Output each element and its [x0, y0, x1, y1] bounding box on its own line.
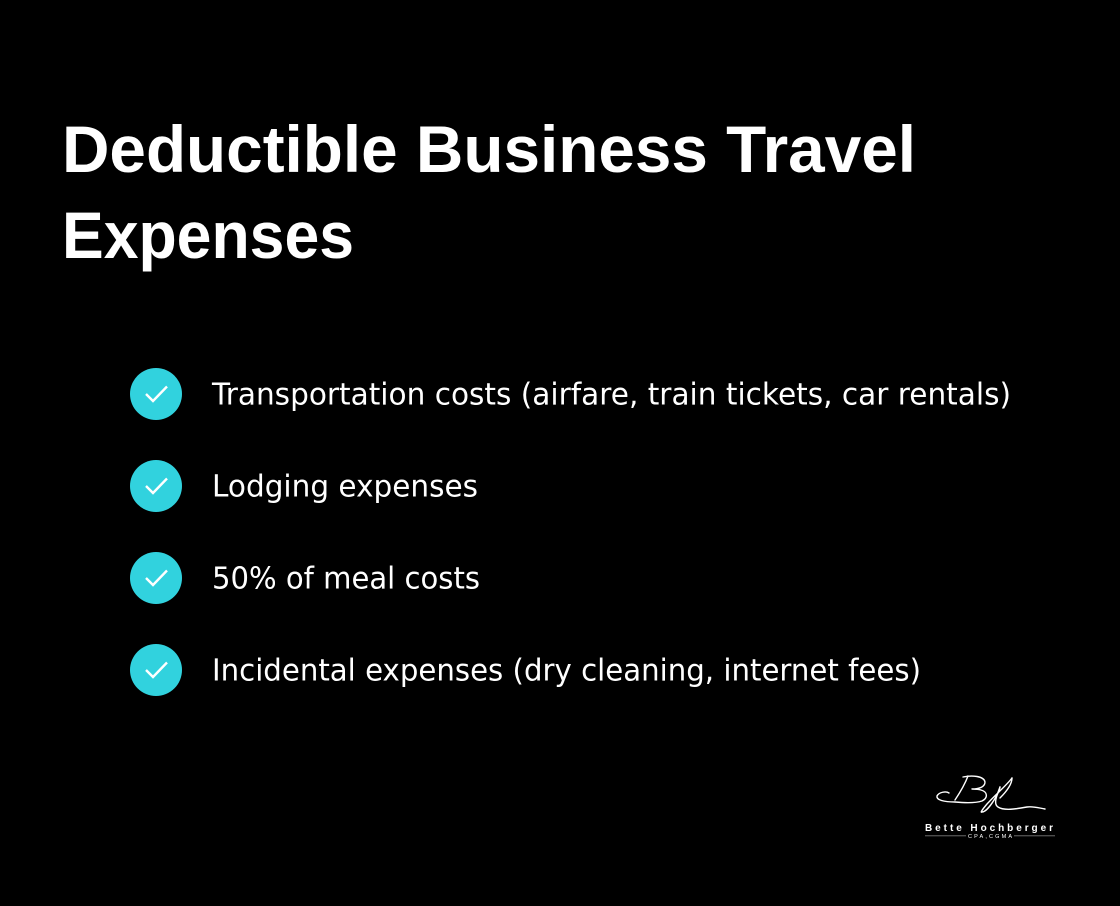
logo credentials: CPA,CGMA [968, 834, 1012, 840]
logo rule right [1014, 834, 1055, 837]
item: incidental expenses: Incidental expenses (dry cleaning, internet fees) [212, 654, 921, 688]
item: lodging expenses [130, 460, 478, 512]
item: transportation costs: Transportation costs (airfare, train tickets, car rentals) [211, 378, 1011, 412]
logo rule left [925, 834, 966, 837]
checklist [130, 368, 1011, 696]
item: incidental expenses [130, 644, 921, 696]
logo name: Bette Hochberger [925, 823, 1053, 834]
item: meal costs [130, 552, 480, 604]
logo: Bette Hochberger signature [925, 776, 1055, 840]
item: lodging expenses: Lodging expenses [212, 470, 478, 504]
item: transportation costs [130, 368, 1011, 420]
title [62, 112, 916, 272]
title: Deductible Business Travel [62, 112, 916, 186]
item: meal costs: 50% of meal costs [212, 562, 480, 596]
title: Expenses [62, 198, 354, 272]
icon: BH signature [937, 776, 1045, 812]
